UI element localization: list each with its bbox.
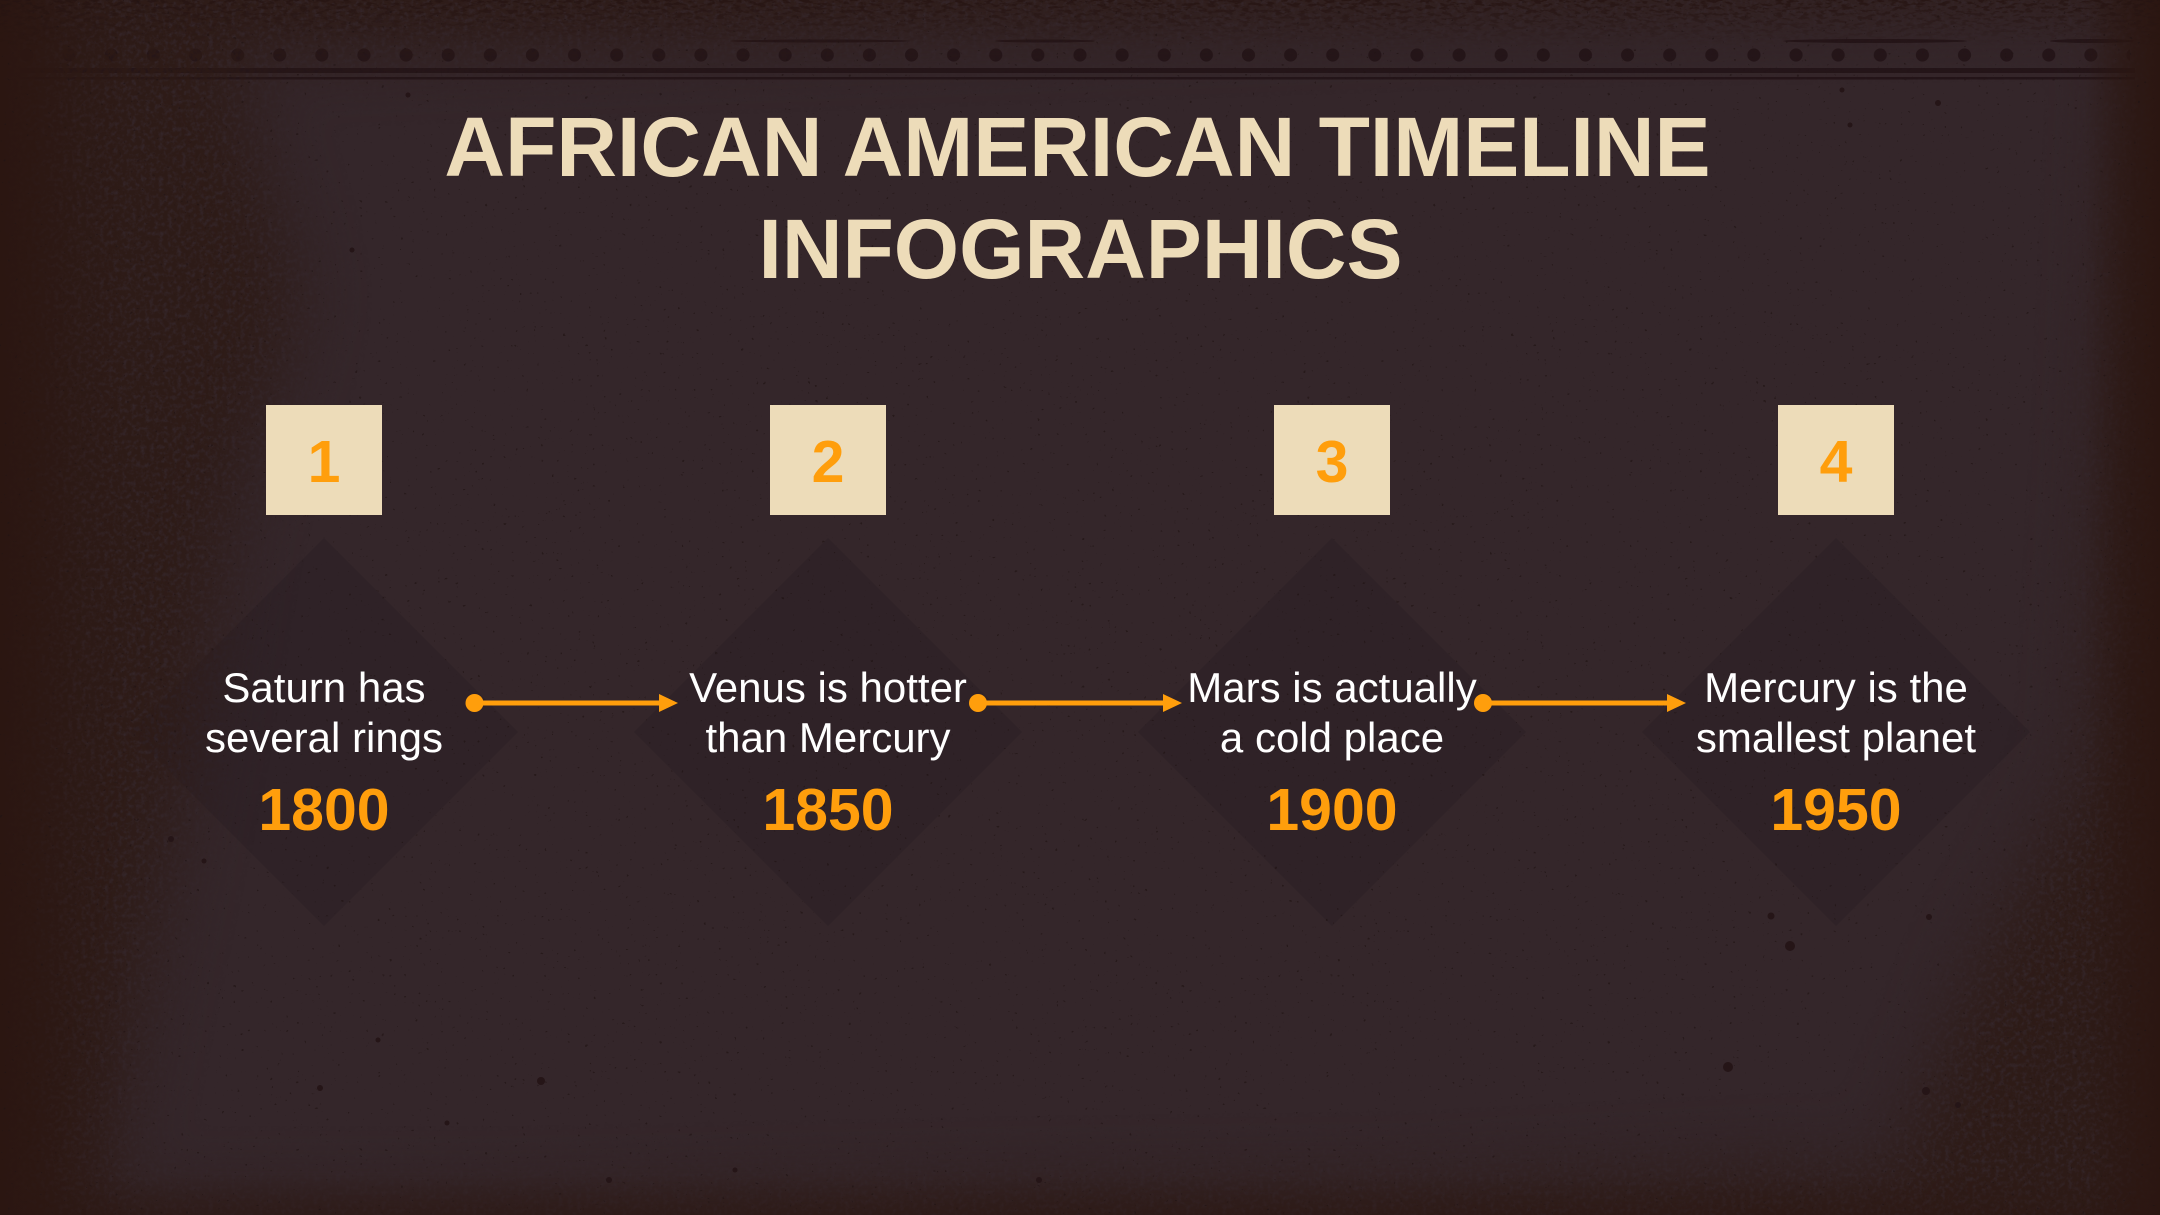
arrow 1 to 2 [466,694,678,712]
year 4: 1950 [1770,777,1902,843]
diamond 2 [634,538,1022,926]
ink speckles [168,88,1961,1183]
step 1 [205,405,443,843]
description 3: a cold place [1220,714,1444,761]
diamond 4 [1642,538,2030,926]
diamond 1 [130,538,518,926]
number box 3: 3 [1316,429,1348,495]
arrow 3 to 4 [1474,694,1686,712]
number box 3 [1274,405,1390,515]
number box 1 [266,405,382,515]
description 2: Venus is hotter [689,664,967,711]
title [444,100,1711,296]
number box 2 [770,405,886,515]
description 3 [1187,664,1477,761]
number box 4 [1778,405,1894,515]
diamond 3 [1138,538,1526,926]
description 1: several rings [205,714,443,761]
step 2 [689,405,967,843]
description 1: Saturn has [222,664,426,711]
decorative top border [20,39,2135,80]
description 4: Mercury is the [1704,664,1968,711]
number box 4: 4 [1820,429,1853,495]
description 1 [205,664,443,761]
description 3: Mars is actually [1187,664,1477,711]
diamonds [130,538,2030,926]
arrow 2 to 3 [969,694,1182,712]
title: AFRICAN AMERICAN TIMELINE [444,100,1711,194]
year 3: 1900 [1266,777,1398,843]
description 4 [1696,664,1976,761]
year 1: 1800 [258,777,390,843]
description 2 [689,664,967,761]
number box 1: 1 [308,429,340,495]
number box 2: 2 [812,429,844,495]
step 4 [1696,405,1976,843]
description 4: smallest planet [1696,714,1976,761]
year 2: 1850 [762,777,894,843]
description 2: than Mercury [705,714,951,761]
title: INFOGRAPHICS [758,202,1403,296]
step 3 [1187,405,1477,843]
